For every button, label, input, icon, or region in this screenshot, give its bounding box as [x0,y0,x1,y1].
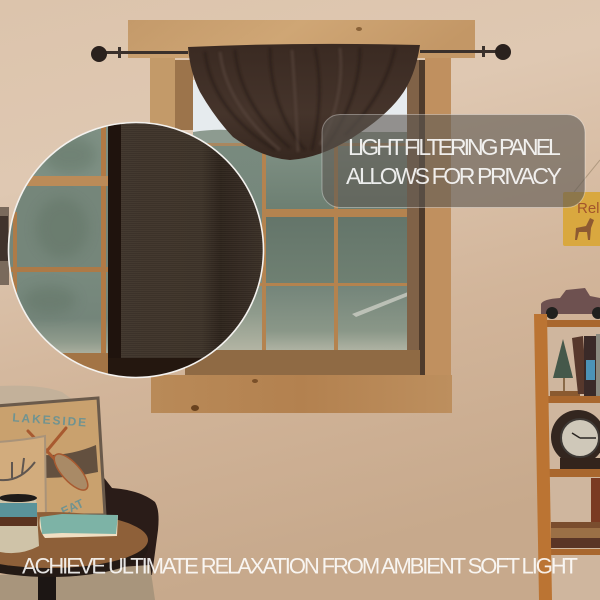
pillow text: LAKESIDE [12,410,87,430]
icon: deer [575,218,594,240]
ceramic mug [0,494,39,553]
picture edge at left wall [0,207,9,285]
large pillow [0,398,105,515]
icon: toy truck [541,288,600,319]
curtain fabric [110,123,263,358]
icon: rustic clock [551,410,600,470]
icon: miniature pine tree [550,339,580,397]
wood trim [128,20,475,413]
shelf back shading [547,325,600,600]
open book [40,514,118,538]
blanket below table [0,565,155,600]
pillow canoe band [44,445,98,478]
callout text: ALLOWS FOR PRIVACY [346,163,562,189]
callout text: LIGHT FILTERING PANEL [348,134,561,160]
bookshelf [534,288,600,600]
caption: ambient soft light: ACHIEVE ULTIMATE RELAXATION FROM AMBIENT SOFT LIGHT [22,554,578,578]
leather chair [98,470,159,575]
table leg [38,575,56,600]
icon: antler [0,458,35,480]
side table with objects [0,494,155,600]
valance swag curtain [188,44,420,160]
table top [0,512,148,568]
throw blanket [0,386,80,420]
red book [591,478,600,524]
window glass and outdoor view [193,80,408,350]
circle border [8,122,264,378]
small pillow [0,436,46,518]
pillow lower text: EAT [59,496,86,519]
window with wooden frame [128,20,475,413]
window muntins [205,143,408,352]
curtain hem [108,124,121,358]
hanging wooden sign [563,160,600,246]
table rim [0,519,148,577]
shelf post [534,314,552,600]
seating corner: chair and pillows [0,386,159,575]
sign string [574,160,600,192]
curtain rod with finials [91,44,511,62]
circle contents [0,120,264,380]
icon: crossed paddles [28,428,93,495]
zoom circle: curtain detail [0,120,264,380]
books upright [572,334,600,396]
shelf boards [546,320,600,555]
sign lettering: Rel [577,200,600,217]
stacked books [551,522,600,548]
window sash and jambs [175,60,425,375]
callout: light filtering panel [322,114,585,208]
